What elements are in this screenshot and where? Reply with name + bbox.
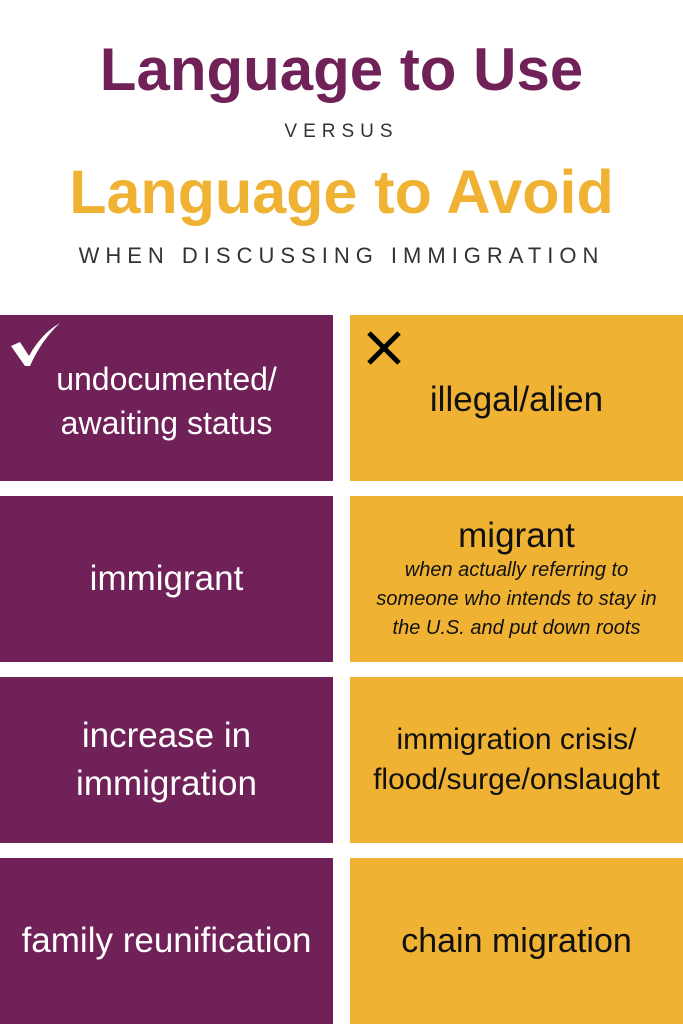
panel: use row 2 <box>0 496 333 662</box>
panel: use row 4: family reunification <box>22 921 311 960</box>
subtitle: when discussing immigration: WHEN DISCUSSING IMMIGRATION <box>79 243 604 268</box>
panel: avoid row 4 <box>350 858 683 1024</box>
icon: x mark <box>367 331 401 365</box>
panel: use row 3: increase in <box>82 716 251 755</box>
panel: use row 4 <box>0 858 333 1024</box>
panel: avoid row 3: flood/surge/onslaught <box>373 763 660 796</box>
panel: avoid row 2: someone who intends to stay in <box>376 588 657 610</box>
panel: avoid row 4: chain migration <box>401 922 632 960</box>
panel: use row 3: immigration <box>76 764 257 803</box>
panel: avoid row 2: the U.S. and put down roots <box>393 616 640 638</box>
title: language to avoid: Language to Avoid <box>69 158 614 226</box>
title: language to use: Language to Use <box>100 36 583 103</box>
panel: avoid row 3 <box>350 677 683 843</box>
panel: use row 1: undocumented/ <box>56 361 277 397</box>
panel: use row 3 <box>0 677 333 843</box>
panel: avoid row 1 <box>350 315 683 481</box>
panel: avoid row 2: when actually referring to <box>405 558 628 580</box>
panel: avoid row 2 <box>350 496 683 662</box>
panel: avoid row 2: migrant <box>458 516 575 554</box>
panel: use row 1: awaiting status <box>61 405 272 441</box>
subtitle: versus: VERSUS <box>284 121 399 142</box>
panel: avoid row 1: illegal/alien <box>430 380 603 419</box>
panel: use row 2: immigrant <box>90 559 243 598</box>
panel: avoid row 3: immigration crisis/ <box>396 723 637 756</box>
icon: checkmark <box>11 323 60 366</box>
panel: use row 1 <box>0 315 333 481</box>
